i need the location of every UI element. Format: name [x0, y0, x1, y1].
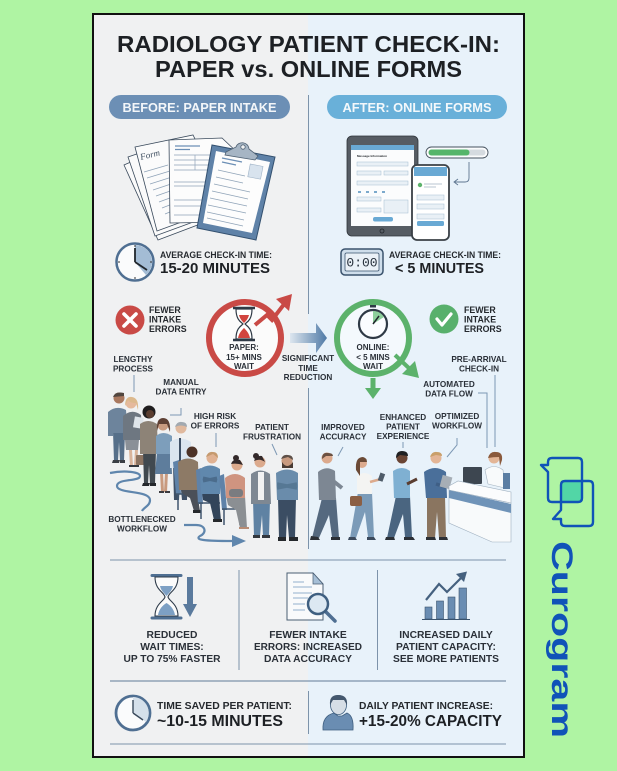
paper wait circle: 15+ MINS — [226, 353, 263, 362]
online wait circle: WAIT — [363, 362, 383, 371]
paper queue labels: BOTTLENECKED — [108, 515, 176, 524]
arrow: bottleneck squiggle — [110, 472, 246, 547]
stat: daily patient increase: +15-20% CAPACITY — [359, 713, 502, 730]
paper queue labels: HIGH RISK — [194, 412, 236, 421]
online queue labels: EXPERIENCE — [377, 432, 430, 441]
text: increased daily patient capacity: PATIENT CAPACITY: — [396, 642, 496, 653]
online queue labels: ACCURACY — [320, 432, 367, 442]
paper queue labels: PROCESS — [113, 364, 154, 374]
stat: online check-in time — [389, 250, 501, 277]
stat: paper check-in time — [160, 250, 272, 277]
title — [117, 31, 500, 82]
text: reduced wait times — [124, 630, 221, 665]
paper queue labels: FRUSTRATION — [243, 432, 301, 442]
stat: daily patient increase: DAILY PATIENT INCREASE: — [359, 700, 493, 712]
text: increased daily patient capacity — [393, 630, 499, 665]
person 3 — [385, 451, 417, 540]
paper queue labels: WORKFLOW — [117, 524, 167, 534]
online queue labels: IMPROVED — [321, 423, 365, 432]
arrow: red rising — [255, 294, 292, 325]
paper queue labels: MANUAL — [163, 378, 199, 387]
arrow: green right — [395, 355, 419, 378]
text: fewer intake errors, online: FEWER — [464, 305, 496, 315]
online wait circle: ONLINE: — [357, 343, 389, 352]
icon: tablet, phone and progress bar — [347, 136, 488, 240]
person 4 — [424, 452, 452, 540]
person 8 — [225, 455, 249, 529]
text: increased daily patient capacity: SEE MORE PATIENTS — [393, 654, 499, 665]
icon: tablet, phone and progress bar: Message Information — [357, 154, 387, 158]
stat: daily patient increase — [359, 700, 502, 730]
icon: wall clock — [116, 244, 154, 280]
icon: clock — [116, 696, 150, 730]
icon: document and magnifier — [287, 573, 335, 621]
stat: time saved per patient — [157, 700, 292, 730]
stat: time saved per patient: ~10-15 MINUTES — [157, 713, 283, 730]
arrow: time reduction — [290, 323, 327, 353]
arrow: green down — [365, 378, 381, 399]
text: fewer intake errors, paper — [149, 305, 187, 334]
online queue labels: DATA FLOW — [425, 390, 473, 398]
paper queue labels — [108, 355, 301, 534]
paper queue labels: OF ERRORS — [191, 422, 240, 430]
text: significant time reduction: REDUCTION — [284, 373, 332, 382]
online queue labels: PATIENT — [386, 422, 420, 432]
paper wait circle — [209, 302, 281, 374]
text: fewer intake errors, online: ERRORS — [464, 324, 502, 334]
text: fewer intake errors, increased accuracy: FEWER INTAKE — [269, 630, 347, 641]
person 7 — [200, 452, 222, 522]
person 10 — [276, 455, 298, 541]
logo icon: chat bubbles — [541, 458, 593, 526]
online queue people — [310, 451, 452, 540]
logo wordmark: Curogram — [545, 541, 578, 738]
reception desk and nurse — [449, 452, 511, 542]
text: reduced wait times: UP TO 75% FASTER — [124, 654, 221, 665]
text: significant time reduction — [282, 354, 334, 382]
online queue labels: OPTIMIZED — [435, 412, 479, 421]
chair 6 — [173, 460, 198, 510]
heading: before paper intake — [109, 95, 290, 119]
icon: green check — [430, 304, 458, 334]
text: fewer intake errors, increased accuracy: ERRORS: INCREASED — [254, 642, 362, 653]
text: fewer intake errors, online — [464, 305, 502, 334]
paper queue labels: DATA ENTRY — [156, 388, 207, 396]
heading: after online forms — [327, 95, 507, 119]
person 1 — [108, 392, 128, 463]
text: fewer intake errors, increased accuracy — [254, 630, 362, 665]
title: PAPER vs. ONLINE FORMS — [155, 56, 462, 82]
online queue labels: AUTOMATED — [423, 380, 475, 389]
text: reduced wait times: REDUCED — [147, 630, 197, 641]
icon: paper forms and clipboard: Form — [138, 147, 161, 162]
paper wait circle: PAPER: — [229, 343, 259, 352]
icon: digital timer — [341, 249, 383, 275]
online queue labels: PRE-ARRIVAL — [451, 355, 507, 364]
text: fewer intake errors, online: INTAKE — [464, 314, 496, 324]
paper queue people — [108, 392, 298, 541]
stat: online check-in time: AVERAGE CHECK-IN TIME: — [389, 250, 501, 261]
icon: paper forms and clipboard — [124, 135, 275, 240]
person 3 — [136, 406, 158, 486]
paper queue labels: PATIENT — [255, 423, 289, 432]
online queue labels: CHECK-IN — [459, 364, 499, 374]
paper wait circle: WAIT — [234, 362, 254, 371]
online wait circle — [337, 302, 409, 374]
text: reduced wait times: WAIT TIMES: — [140, 642, 204, 653]
text: fewer intake errors, paper: INTAKE — [149, 314, 181, 324]
heading: before paper intake: BEFORE: PAPER INTAKE — [122, 100, 277, 115]
icon: patient — [323, 695, 353, 730]
online queue labels — [320, 355, 507, 457]
icon: red x — [116, 306, 144, 334]
paper queue labels: LENGTHY — [113, 355, 153, 364]
text: fewer intake errors, increased accuracy: DATA ACCURACY — [264, 654, 352, 665]
text: significant time reduction: SIGNIFICANT — [282, 354, 334, 363]
person 2 — [348, 457, 385, 540]
text: fewer intake errors, paper: ERRORS — [149, 324, 187, 334]
stat: paper check-in time: 15-20 MINUTES — [160, 260, 270, 277]
chair 7 — [196, 468, 220, 519]
person 1 — [310, 452, 342, 540]
text: fewer intake errors, paper: FEWER — [149, 305, 181, 315]
person 2 — [123, 397, 144, 467]
title: RADIOLOGY PATIENT CHECK-IN: — [117, 31, 500, 57]
heading: after online forms: AFTER: ONLINE FORMS — [342, 100, 492, 115]
person 4 — [155, 418, 172, 493]
icon: rising bar chart — [422, 572, 470, 620]
text: significant time reduction: TIME — [298, 364, 318, 373]
person 9 — [251, 453, 271, 538]
online queue labels: WORKFLOW — [432, 422, 482, 430]
stat: time saved per patient: TIME SAVED PER PATIENT: — [157, 700, 292, 712]
infographic frame — [93, 14, 524, 757]
online queue labels: ENHANCED — [380, 413, 426, 422]
online wait circle: < 5 MINS — [356, 353, 390, 362]
icon: digital timer: 0:00 — [346, 256, 378, 270]
stat: paper check-in time: AVERAGE CHECK-IN TIME: — [160, 250, 272, 261]
person 6 — [178, 446, 201, 513]
text: increased daily patient capacity: INCREASED DAILY — [399, 630, 493, 641]
stat: online check-in time: < 5 MINUTES — [395, 260, 484, 277]
chair 8 — [219, 474, 242, 525]
icon: hourglass and down arrow — [152, 576, 197, 618]
person 5 — [170, 422, 191, 500]
